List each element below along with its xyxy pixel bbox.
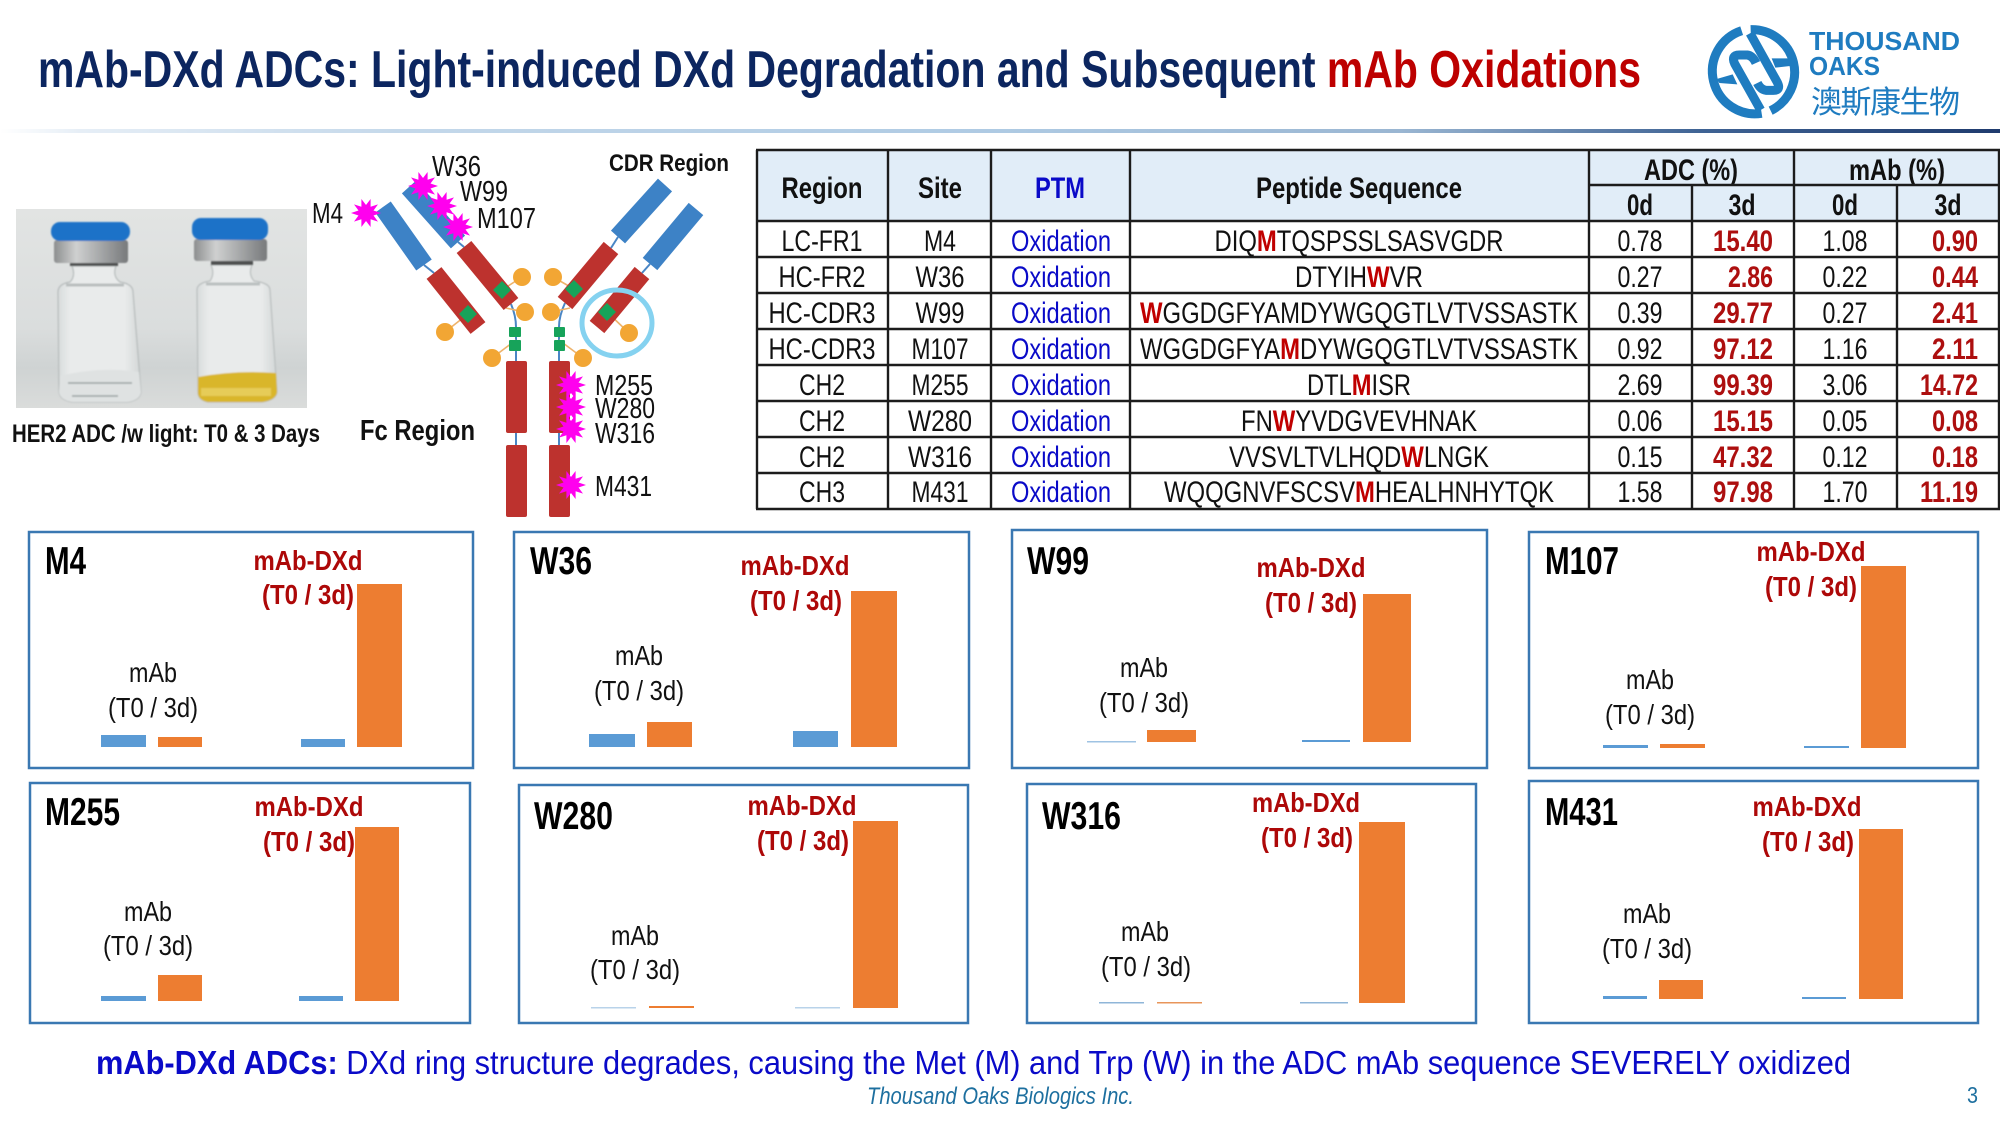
row CH2 W316: VVSVLTVLHQDWLNGK xyxy=(1229,441,1489,474)
row CH3 M431: M431 xyxy=(912,476,968,509)
row CH3 M431: 11.19 xyxy=(1920,476,1978,509)
light chain and heavy chain variable domains xyxy=(383,185,696,265)
table header: ADC (%) xyxy=(1644,154,1738,187)
row CH2 M255 xyxy=(799,369,1978,402)
panel: W36 bar chart: mAb xyxy=(615,640,663,671)
panel: M255 bar chart xyxy=(30,783,470,1023)
row CH2 M255: 2.69 xyxy=(1618,369,1662,402)
green hinge and disulfide markers xyxy=(459,280,616,351)
panel: M4 bar chart: M4 xyxy=(45,540,86,583)
highlight ring xyxy=(582,290,652,356)
panel: M431 bar chart: mAb xyxy=(1623,898,1671,929)
row HC-CDR3 W99: W99 xyxy=(916,297,964,330)
panel: W316 bar chart: mAb-DXd xyxy=(1252,787,1360,818)
panel: W99 bar chart: mAb-DXd xyxy=(1256,552,1366,583)
row HC-CDR3 M107 xyxy=(768,333,1978,366)
CDR Region label: CDR Region xyxy=(609,150,729,177)
row LC-FR1 M4: 0.90 xyxy=(1932,225,1978,258)
row HC-CDR3 M107: HC-CDR3 xyxy=(768,333,876,366)
payload linkers xyxy=(445,277,629,358)
row HC-FR2 W36: Oxidation xyxy=(1011,261,1111,294)
row CH2 W280: CH2 xyxy=(799,405,845,438)
oxidation site bursts xyxy=(351,172,586,499)
row CH2 W316: Oxidation xyxy=(1011,441,1111,474)
row HC-CDR3 M107: WGGDGFYAMDYWGQGTLVTVSSASTK xyxy=(1140,333,1578,366)
icon: logo mark xyxy=(1712,30,1795,114)
row CH2 M255: 3.06 xyxy=(1822,369,1868,402)
panel: W316 bar chart: (T0 / 3d) xyxy=(1101,951,1191,982)
panel: W280 bar chart: W280 xyxy=(534,795,613,838)
panel: M107 bar chart xyxy=(1529,532,1978,768)
row CH2 M255: CH2 xyxy=(799,369,845,402)
logo wordmark: OAKS xyxy=(1809,51,1880,81)
orange payload dots xyxy=(436,268,638,367)
icon: left clear vial xyxy=(51,222,141,402)
row HC-CDR3 M107: 2.11 xyxy=(1932,333,1978,366)
row CH3 M431: WQQGNVFSCSVMHEALHNHYTQK xyxy=(1164,476,1554,509)
panel: W280 bar chart: mAb xyxy=(611,920,659,951)
row HC-CDR3 W99 xyxy=(768,297,1978,330)
panel: W99 bar chart: W99 xyxy=(1027,540,1089,583)
row CH2 W280 xyxy=(799,405,1978,438)
panel: W36 bar chart: (T0 / 3d) xyxy=(594,675,684,706)
row HC-CDR3 W99: 29.77 xyxy=(1713,297,1773,330)
row CH2 W280: 0.08 xyxy=(1932,405,1978,438)
row CH2 W316: 0.18 xyxy=(1932,441,1978,474)
photo caption: HER2 ADC /w light: T0 & 3 Days xyxy=(12,420,320,448)
panel: M255 bar chart: mAb-DXd xyxy=(254,791,364,822)
row CH2 W316: 47.32 xyxy=(1713,441,1773,474)
site labels: M255 xyxy=(595,370,653,402)
panel: W316 bar chart: (T0 / 3d) xyxy=(1261,822,1353,853)
panel: W99 bar chart: (T0 / 3d) xyxy=(1265,587,1357,618)
logo wordmark: THOUSAND xyxy=(1809,26,1960,56)
photo: two vials xyxy=(16,209,307,408)
site labels: M107 xyxy=(477,203,536,235)
row HC-CDR3 M107: 97.12 xyxy=(1713,333,1773,366)
row CH2 W280: 0.06 xyxy=(1618,405,1662,438)
row CH2 W280: 0.05 xyxy=(1822,405,1868,438)
panel: M4 bar chart: mAb xyxy=(129,657,177,688)
row LC-FR1 M4: 0.78 xyxy=(1618,225,1662,258)
page number: 3 xyxy=(1967,1082,1978,1108)
site labels: M4 xyxy=(312,198,343,230)
panel: W280 bar chart: mAb-DXd xyxy=(748,790,856,821)
table header: mAb (%) xyxy=(1849,154,1945,187)
row HC-CDR3 W99: HC-CDR3 xyxy=(768,297,876,330)
row CH2 W316: 0.12 xyxy=(1822,441,1868,474)
panel: W316 bar chart: mAb xyxy=(1121,916,1169,947)
table header: 0d xyxy=(1832,189,1858,222)
logo xyxy=(1712,26,1960,120)
panel: M255 bar chart: M255 xyxy=(45,791,120,834)
row CH2 M255: Oxidation xyxy=(1011,369,1111,402)
row LC-FR1 M4: Oxidation xyxy=(1011,225,1111,258)
site labels xyxy=(312,151,655,503)
panel: M107 bar chart: M107 xyxy=(1545,540,1619,583)
row CH2 W280: FNWYVDGVEVHNAK xyxy=(1241,405,1477,438)
Fc Region label: Fc Region xyxy=(360,415,475,447)
site labels: W99 xyxy=(460,176,508,208)
panel: W36 bar chart xyxy=(514,532,969,768)
row CH2 W280: Oxidation xyxy=(1011,405,1111,438)
site labels: W280 xyxy=(595,393,655,425)
row CH3 M431: 1.70 xyxy=(1822,476,1868,509)
row HC-CDR3 W99: 0.39 xyxy=(1618,297,1662,330)
panel: W36 bar chart: mAb-DXd xyxy=(740,550,850,581)
row CH2 M255: M255 xyxy=(912,369,968,402)
row LC-FR1 M4: DIQMTQSPSSLSASVGDR xyxy=(1214,225,1504,258)
row CH2 M255: 99.39 xyxy=(1713,369,1773,402)
row HC-CDR3 W99: WGGDGFYAMDYWGQGTLVTVSSASTK xyxy=(1140,297,1578,330)
row CH3 M431: 1.58 xyxy=(1618,476,1662,509)
row LC-FR1 M4: 15.40 xyxy=(1713,225,1773,258)
row CH3 M431: Oxidation xyxy=(1011,476,1111,509)
panel: W280 bar chart: (T0 / 3d) xyxy=(590,954,680,985)
panel: W316 bar chart: W316 xyxy=(1042,795,1121,838)
panel: W99 bar chart xyxy=(1012,530,1487,768)
row HC-FR2 W36: DTYIHWVR xyxy=(1295,261,1423,294)
panel: W36 bar chart: (T0 / 3d) xyxy=(750,585,842,616)
panel: W280 bar chart: (T0 / 3d) xyxy=(757,825,849,856)
table: PTM oxidation data xyxy=(756,150,2000,509)
row HC-CDR3 M107: 1.16 xyxy=(1822,333,1868,366)
panel: M431 bar chart: mAb-DXd xyxy=(1752,791,1862,822)
constant domains xyxy=(434,247,642,517)
panel: M431 bar chart xyxy=(1529,781,1978,1023)
title: mAb-DXd ADCs: Light-induced DXd Degradation and Subsequent mAb Oxidations xyxy=(38,41,1641,99)
table grid xyxy=(756,150,2000,509)
row CH3 M431: CH3 xyxy=(799,476,845,509)
table header: 3d xyxy=(1728,189,1756,222)
icon: right yellow vial xyxy=(192,218,277,402)
panel: M107 bar chart: mAb xyxy=(1626,664,1674,695)
panel: M255 bar chart: (T0 / 3d) xyxy=(263,826,355,857)
table header: Site xyxy=(918,172,962,205)
row HC-CDR3 W99: 0.27 xyxy=(1822,297,1868,330)
row LC-FR1 M4 xyxy=(782,225,1978,258)
row CH2 W316: CH2 xyxy=(799,441,845,474)
table header: Region xyxy=(782,172,862,205)
panel: W280 bar chart xyxy=(519,785,968,1023)
table header: PTM xyxy=(1035,172,1085,205)
row LC-FR1 M4: M4 xyxy=(924,225,956,258)
row HC-CDR3 M107: Oxidation xyxy=(1011,333,1111,366)
row LC-FR1 M4: 1.08 xyxy=(1822,225,1868,258)
row HC-FR2 W36: 2.86 xyxy=(1728,261,1773,294)
site labels: M431 xyxy=(595,471,652,503)
row CH2 W316: W316 xyxy=(908,441,972,474)
row HC-FR2 W36: W36 xyxy=(916,261,964,294)
panel: M4 bar chart: (T0 / 3d) xyxy=(262,579,354,610)
panel: W99 bar chart: mAb xyxy=(1120,652,1168,683)
row CH2 W316: 0.15 xyxy=(1618,441,1662,474)
site labels: W36 xyxy=(432,151,481,183)
table header: Peptide Sequence xyxy=(1256,172,1462,205)
row HC-FR2 W36 xyxy=(778,261,1978,294)
panel: W36 bar chart: W36 xyxy=(530,540,592,583)
panel: M431 bar chart: M431 xyxy=(1545,791,1618,834)
logo wordmark: 澳斯康生物 xyxy=(1811,85,1960,120)
row CH2 W316 xyxy=(799,441,1978,474)
row HC-CDR3 W99: 2.41 xyxy=(1932,297,1978,330)
panel: M107 bar chart: (T0 / 3d) xyxy=(1605,699,1695,730)
site labels: W316 xyxy=(595,418,655,450)
panel: M431 bar chart: (T0 / 3d) xyxy=(1602,933,1692,964)
panel: M431 bar chart: (T0 / 3d) xyxy=(1762,826,1854,857)
row CH2 W280: 15.15 xyxy=(1713,405,1773,438)
panel: M255 bar chart: (T0 / 3d) xyxy=(103,930,193,961)
table header: 0d xyxy=(1627,189,1653,222)
row HC-FR2 W36: 0.27 xyxy=(1618,261,1662,294)
panel: W316 bar chart xyxy=(1027,784,1476,1023)
table header xyxy=(757,150,2000,222)
row CH2 M255: 14.72 xyxy=(1920,369,1978,402)
row CH2 M255: DTLMISR xyxy=(1307,369,1411,402)
header rule xyxy=(0,129,2000,133)
row HC-FR2 W36: HC-FR2 xyxy=(778,261,866,294)
row HC-FR2 W36: 0.44 xyxy=(1932,261,1978,294)
panel: M4 bar chart: (T0 / 3d) xyxy=(108,692,198,723)
panel: M107 bar chart: (T0 / 3d) xyxy=(1765,571,1857,602)
panel: M107 bar chart: mAb-DXd xyxy=(1756,536,1866,567)
logo wordmark xyxy=(1809,26,1960,120)
row HC-CDR3 M107: 0.92 xyxy=(1618,333,1662,366)
table header: 3d xyxy=(1934,189,1962,222)
panel: W99 bar chart: (T0 / 3d) xyxy=(1099,687,1189,718)
row CH3 M431 xyxy=(799,476,1978,509)
panel: M255 bar chart: mAb xyxy=(124,896,172,927)
row CH3 M431: 97.98 xyxy=(1713,476,1773,509)
row CH2 W280: W280 xyxy=(908,405,972,438)
hinge and linker lines xyxy=(424,237,650,445)
footer company name: Thousand Oaks Biologics Inc. xyxy=(867,1083,1134,1110)
row HC-FR2 W36: 0.22 xyxy=(1822,261,1868,294)
row LC-FR1 M4: LC-FR1 xyxy=(782,225,862,258)
antibody diagram xyxy=(312,150,729,517)
panel: M4 bar chart xyxy=(29,532,473,768)
panel: M4 bar chart: mAb-DXd xyxy=(254,545,362,576)
row HC-CDR3 M107: M107 xyxy=(912,333,968,366)
conclusion text: mAb-DXd ADCs: DXd ring structure degrades, causing the Met (M) and Trp (W) in the ADC mAb sequence SEVERELY oxidized xyxy=(96,1044,1851,1081)
row HC-CDR3 W99: Oxidation xyxy=(1011,297,1111,330)
